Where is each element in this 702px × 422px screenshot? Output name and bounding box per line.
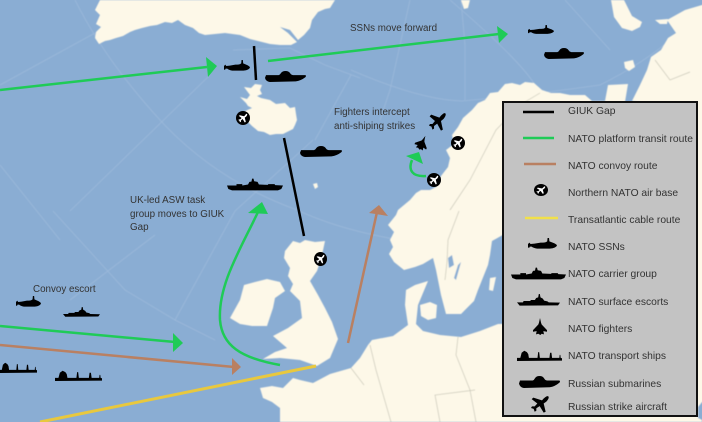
- continental Europe: [260, 281, 702, 422]
- legend: GIUK Gap: GIUK Gap: [568, 106, 616, 117]
- arrow: Atlantic transit: [0, 326, 183, 352]
- Russia Arctic coast: [632, 5, 702, 110]
- icon: NATO fighter: [413, 133, 431, 152]
- right strip: [695, 100, 702, 402]
- legend: surface escorts: [517, 294, 668, 308]
- legend: air base: Northern NATO air base: [568, 188, 678, 199]
- Great Britain: [263, 240, 338, 366]
- legend: transport ships: [517, 351, 666, 362]
- legend: Russian strike aircraft: Russian strike aircraft: [568, 402, 667, 413]
- arrow: convoy Atlantic: [0, 345, 241, 375]
- legend: cable route: Transatlantic cable route: [568, 215, 681, 226]
- icon: air base Iceland: [236, 111, 250, 125]
- Scandinavia: [388, 82, 640, 314]
- arrow: Atlantic to Iceland: [0, 57, 217, 90]
- Faroe Islands: [313, 183, 318, 189]
- icon: air base Scotland: [314, 252, 327, 266]
- legend: convoy route: NATO convoy route: [568, 161, 658, 172]
- Arctic islands: [461, 0, 668, 71]
- Iceland: [240, 84, 297, 135]
- icon: transport ship right: [55, 371, 102, 381]
- icon: NATO SSN convoy: [16, 296, 41, 307]
- legend: Russian submarines: [519, 376, 661, 390]
- lakes and borders: [351, 60, 690, 422]
- panel: legend: [503, 102, 697, 416]
- legend: Russian submarines: Russian submarines: [568, 379, 661, 390]
- Ireland: [230, 279, 285, 326]
- legend: fighters: [533, 318, 632, 335]
- legend: carrier group: NATO carrier group: [568, 269, 657, 280]
- icon: NATO SSN forward: [528, 25, 554, 34]
- legend: Russian strike aircraft: [531, 396, 667, 413]
- icon: Russian submarine Norwegian Sea: [300, 146, 342, 157]
- legend: surface escorts: NATO surface escorts: [568, 297, 668, 308]
- arrow: UK ASW group: [220, 202, 280, 365]
- Greenland: [95, 0, 335, 45]
- legend: carrier group: [511, 268, 657, 280]
- GIUK gap line south: [284, 138, 304, 236]
- icon: transport ship left: [0, 363, 37, 373]
- arrow: SSNs forward: [268, 26, 508, 61]
- annotation: UK-led ASW task group: group moves to GIUK: [130, 209, 225, 220]
- annotation: convoy escort: Convoy escort: [33, 284, 96, 295]
- legend: transport ships: NATO transport ships: [568, 351, 666, 362]
- corner sea: [698, 402, 702, 420]
- legend: fighters: NATO fighters: [568, 324, 632, 335]
- icon: Russian submarine Barents: [544, 48, 584, 59]
- annotation: fighters intercept: anti-shiping strikes: [334, 121, 415, 132]
- icon: Russian submarine north: [265, 71, 306, 82]
- arrow: convoy to Norway: [348, 205, 388, 343]
- icon: air base north Norway: [451, 136, 465, 150]
- annotation: fighters intercept: Fighters intercept: [334, 107, 410, 118]
- Danish islands and Gotland: [420, 277, 496, 320]
- icon: carrier group: [227, 179, 283, 190]
- annotation: UK-led ASW task group: Gap: [130, 222, 149, 233]
- arrow: fighters: [406, 152, 426, 176]
- icon: Russian strike aircraft: [429, 113, 446, 131]
- legend: air base: [534, 184, 678, 199]
- GIUK gap line north: [254, 46, 256, 80]
- legend: SSNs: [528, 238, 625, 253]
- transatlantic cable: [40, 366, 316, 422]
- legend: GIUK Gap: [523, 106, 616, 117]
- icon: air base central Norway: [427, 173, 441, 187]
- icon: surface escort: [63, 307, 100, 317]
- legend: SSNs: NATO SSNs: [568, 242, 625, 253]
- icon: NATO SSN Iceland: [224, 60, 250, 71]
- annotation: UK-led ASW task group: UK-led ASW task: [130, 195, 205, 206]
- annotation: SSNs move forward: SSNs move forward: [350, 23, 437, 34]
- legend: transit route: NATO platform transit route: [568, 134, 693, 145]
- legend: convoy route: [524, 161, 658, 172]
- graticule: [0, 0, 690, 340]
